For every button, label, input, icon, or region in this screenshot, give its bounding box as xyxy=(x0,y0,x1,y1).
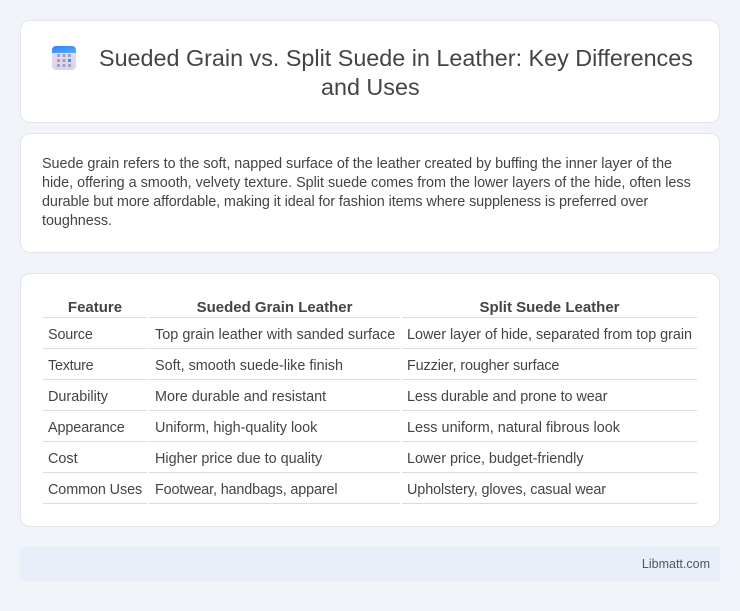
table header: Feature xyxy=(68,299,122,316)
table row: texture xyxy=(48,358,559,374)
table row: durability xyxy=(48,389,608,405)
table row: durability: Durability xyxy=(48,389,108,405)
text block: introduction: hide, offering a smooth, velvety texture. Split suede comes from the lower layers of the hide, often less xyxy=(42,175,691,191)
table row: common uses: Common Uses xyxy=(48,482,142,498)
table row: common uses: Upholstery, gloves, casual wear xyxy=(407,482,606,498)
table row: durability: More durable and resistant xyxy=(155,389,326,405)
panel: comparison table xyxy=(20,273,720,527)
table row: appearance xyxy=(48,420,620,436)
table row: cost: Lower price, budget-friendly xyxy=(407,451,583,467)
footer xyxy=(20,547,720,581)
table row: cost xyxy=(48,451,584,467)
footer credit: Libmatt.com xyxy=(642,557,710,571)
table row: appearance: Less uniform, natural fibrous look xyxy=(407,420,620,436)
text block: introduction xyxy=(42,156,691,229)
table row: texture: Fuzzier, rougher surface xyxy=(407,358,559,374)
table row: source: Top grain leather with sanded surface xyxy=(155,327,395,343)
icon: calendar xyxy=(52,46,76,70)
table row: common uses xyxy=(48,482,606,498)
panel: title card xyxy=(20,20,720,123)
table row: durability: Less durable and prone to wear xyxy=(407,389,607,405)
table header: Sueded Grain Leather xyxy=(197,299,352,316)
title: Sueded Grain vs. Split Suede in Leather: Key Differences xyxy=(99,45,693,71)
table header: Split Suede Leather xyxy=(479,299,620,316)
text block: introduction: Suede grain refers to the soft, napped surface of the leather created by buffing the inner layer of the xyxy=(42,156,672,172)
table row: texture: Texture xyxy=(48,358,93,374)
table row: source: Lower layer of hide, separated from top grain xyxy=(407,327,692,343)
panel: introduction xyxy=(20,133,720,253)
table header xyxy=(68,299,620,316)
table row: cost: Higher price due to quality xyxy=(155,451,322,467)
table row: appearance: Uniform, high-quality look xyxy=(155,420,317,436)
title xyxy=(99,45,693,100)
table row: texture: Soft, smooth suede-like finish xyxy=(155,358,343,374)
table row: cost: Cost xyxy=(48,451,78,467)
text block: introduction: durable but more affordable, making it ideal for fashion items where suppleness is preferred over xyxy=(42,194,648,210)
title: and Uses xyxy=(321,74,420,100)
table row: common uses: Footwear, handbags, apparel xyxy=(155,482,337,498)
text block: introduction: toughness. xyxy=(42,213,112,229)
table row: source xyxy=(48,327,692,343)
table row: appearance: Appearance xyxy=(48,420,125,436)
table row: source: Source xyxy=(48,327,93,343)
